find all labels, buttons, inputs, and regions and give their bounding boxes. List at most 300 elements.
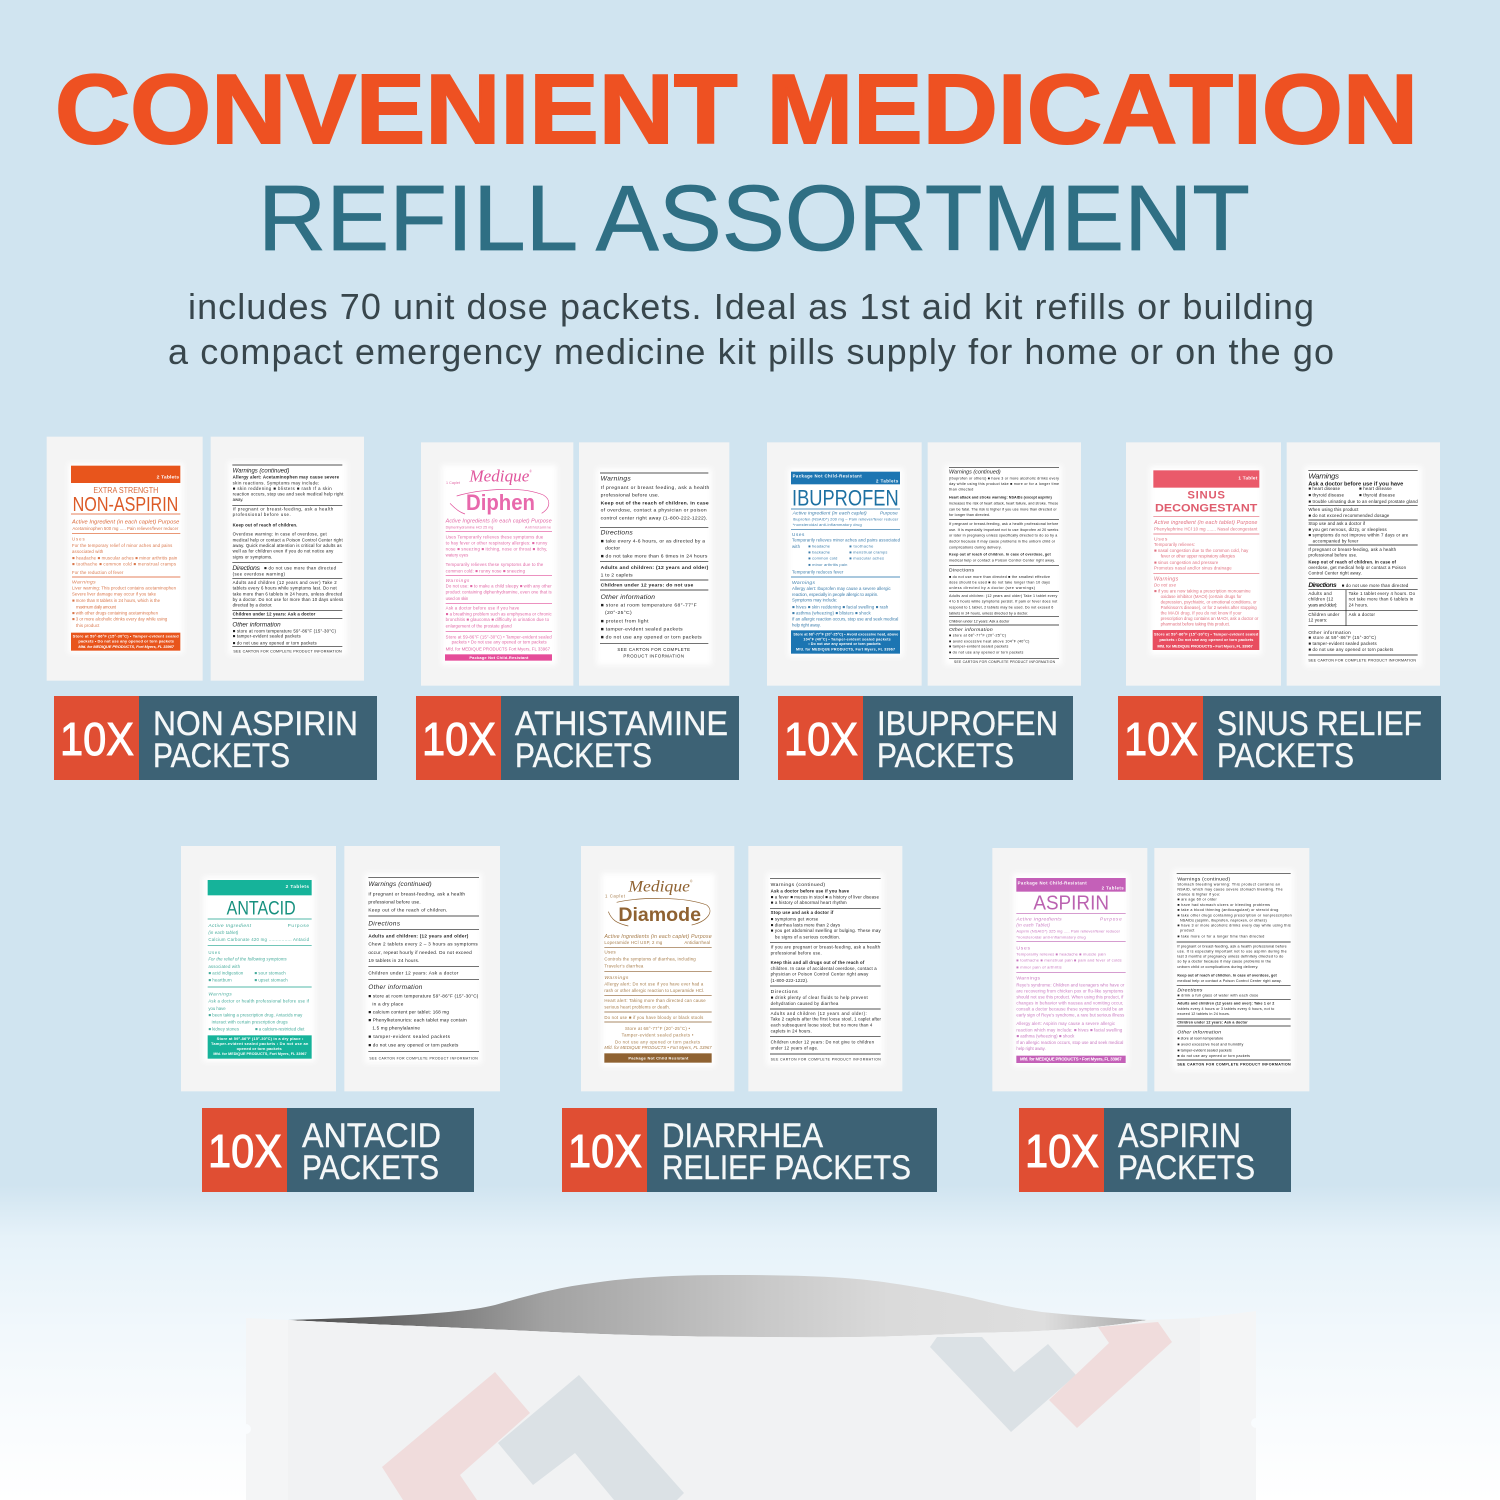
- packet back: sinus decongestant: Take 1 tablet every 4 hours. Do: [1349, 591, 1416, 596]
- packet front: diamode: Antidiarrheal: [684, 940, 710, 945]
- packet front: diphen: used on skin: [446, 596, 469, 601]
- packet back: sinus decongestant: ■ do not use more than directed: [1342, 583, 1409, 588]
- packet front: diamode: Traveler's diarrhea: [604, 964, 644, 969]
- packet front: antacid: (in each tablet): [208, 930, 239, 935]
- packet front: sinus decongestant: Uses: [1154, 537, 1168, 543]
- packet back: diamode: Adults and children (12 years and older):: [771, 1011, 867, 1016]
- packet front: sinus decongestant: prescription drug contains an MAOI, ask a doctor or: [1161, 616, 1259, 621]
- panel: sinus decongestant packet pair: [1126, 442, 1440, 686]
- packet front: antacid: ■ sour stomach: [254, 971, 286, 976]
- packet front: diphen: Package Not Child-Resistant: [469, 655, 529, 660]
- packet back: antacid: in a dry place: [372, 1002, 404, 1007]
- packet front: non-aspirin: Severe liver damage may occur if you take: [72, 592, 157, 597]
- packet back: diamode: be signs of a serious condition.: [775, 934, 840, 939]
- packet back: diphen: Adults and children: (12 years and older): [601, 565, 709, 571]
- panel: ibuprofen packet pair: [767, 442, 1081, 686]
- packet front: sinus decongestant: depression, psychiatric, or emotional conditions, or: [1161, 599, 1257, 604]
- packet back: diamode: ■ you get abdominal swelling or bulging. These may: [771, 928, 881, 933]
- packet front: non-aspirin: maximum daily amount: [76, 604, 117, 609]
- packet front: diphen: Temporarily relieves these symptoms due to the: [446, 562, 544, 567]
- packet back: ibuprofen: respond to 1 tablet, 2 tablets may be used. Do not exceed 6: [949, 605, 1053, 609]
- packet back: aspirin: Keep out of reach of children. In case of overdose, get: [1177, 974, 1277, 978]
- packet front: diphen: watery eyes: [446, 552, 468, 557]
- packet back: diamode: Keep this and all drugs out of the reach of: [771, 960, 865, 965]
- packet front: aspirin: ■ toothache ■ menstrual pain ■ pain and fever of colds: [1016, 958, 1122, 963]
- packet back: diamode: professional before use.: [771, 950, 822, 955]
- packet back: diphen: SEE CARTON FOR COMPLETE: [617, 647, 690, 652]
- packet front: diphen: Warnings: [446, 578, 470, 583]
- packet front: antacid: ANTACID: [227, 899, 296, 920]
- packet back: non-aspirin: ■ store at room temperature 59°-86°F (15°-30°C): [233, 629, 337, 634]
- badge: aspirin: 10X: [1025, 1125, 1099, 1177]
- packet back: diphen: of overdose, contact a physician or poison: [601, 508, 707, 514]
- packet front: ibuprofen: ■ minor arthritis pain: [808, 562, 847, 567]
- packet back: aspirin: ■ do not use any opened or torn packets: [1177, 1054, 1250, 1058]
- packet front: diphen: Diphen: [466, 490, 535, 515]
- packet front: ibuprofen: ■ headache: [808, 544, 831, 549]
- packet front: non-aspirin: this product: [76, 623, 100, 628]
- packet front: sinus decongestant: Parkinson's disease), or for 2 weeks after stopping: [1161, 605, 1257, 610]
- packet back: aspirin: use. It is especially important not to use aspirin during the: [1177, 949, 1287, 953]
- packet front: diamode: Controls the symptoms of diarrhea, including: [604, 957, 696, 962]
- packet front: diamode: Heart alert: Taking more than directed can cause: [604, 998, 706, 1003]
- packet back: antacid: ■ store at room temperature 59°-86°F (15°-30°C): [368, 994, 479, 999]
- badge: ibuprofen: IBUPROFEN: [877, 705, 1058, 743]
- packet back: diamode: Children under 12 years: Do not give to children: [771, 1039, 875, 1044]
- packet front: aspirin: ■ asthma (wheezing) ■ shock: [1016, 1034, 1075, 1039]
- packet front: ibuprofen: ■ hives ■ skin reddening ■ facial swelling ■ rash: [792, 604, 889, 609]
- packet back: diphen: ■ do not take more than 6 times in 24 hours: [601, 554, 708, 560]
- packet front: diamode: Store at 68°-77°F (20°-25°C) •: [625, 1026, 690, 1031]
- packet back: ibuprofen: can be fatal. The risk is higher if you use more than directed or: [949, 507, 1057, 511]
- packet back: ibuprofen: Keep out of reach of children. In case of overdose, get: [949, 553, 1051, 557]
- pouch body: [246, 1311, 1256, 1500]
- packet back: aspirin: so by a doctor because it may cause problems in the: [1177, 960, 1271, 964]
- packet front: aspirin: should not use this product. When using this product, if: [1016, 994, 1124, 999]
- packet back: sinus decongestant: 24 hours.: [1349, 602, 1368, 607]
- packet front: sinus decongestant: 1 Tablet: [1238, 475, 1258, 480]
- packet back: aspirin: Children under 12 years: Ask a doctor: [1177, 1020, 1248, 1024]
- packet front: diamode: rash or other allergic reaction to Loperamide HCl.: [604, 988, 704, 993]
- badge: diarrhea relief: DIARRHEA: [662, 1117, 823, 1155]
- packet back: sinus decongestant: SEE CARTON FOR COMPLETE PRODUCT INFORMATION: [1308, 659, 1416, 663]
- packet back: diamode: children. In case of accidental overdose, contact a: [771, 966, 877, 971]
- packet front: antacid: Warnings: [208, 992, 232, 997]
- packet back: non-aspirin: (see overdose warning): [233, 572, 286, 577]
- packet front: antacid: associated with: [208, 964, 241, 969]
- packet back: ibuprofen: for longer than directed.: [949, 513, 990, 517]
- packet front: ibuprofen: Active ingredient (in each caplet): [792, 511, 867, 517]
- packet back: ibuprofen: or later in pregnancy unless specifically directed to do so by a: [949, 534, 1058, 538]
- packet back: sinus decongestant: [1287, 442, 1440, 686]
- packet back: diamode: ■ diarrhea lasts more than 2 days: [771, 922, 840, 927]
- packet back: diamode: physician or Poison Control Center right away: [771, 972, 869, 977]
- packet back: aspirin: exceed 12 tablets in 24 hours.: [1177, 1012, 1230, 1016]
- packet back: aspirin: NSAIDs (aspirin, ibuprofen, naproxen, or others): [1180, 918, 1267, 922]
- badge: antihistamine: [416, 696, 739, 780]
- packet front: diamode: Allergy alert: Do not use if you have ever had a: [604, 981, 704, 986]
- packet back: ibuprofen: [928, 442, 1081, 686]
- packet front: antacid: [181, 846, 336, 1091]
- packet front: antacid: Calcium Carbonate 420 mg ................ Antacid: [208, 937, 310, 942]
- packet front: non-aspirin: [47, 437, 203, 681]
- packet back: ibuprofen: Warnings (continued): [949, 469, 1001, 475]
- packet back: sinus decongestant: If pregnant or breast-feeding, ask a health: [1308, 547, 1397, 552]
- packet back: antacid: Adults and children: (12 years and older): [368, 934, 469, 939]
- packet back: diamode: SEE CARTON FOR COMPLETE PRODUCT INFORMATION: [771, 1057, 881, 1061]
- packet front: diamode: Package Not Child Resistant: [628, 1055, 689, 1060]
- packet back: sinus decongestant: Children under: [1308, 612, 1340, 617]
- packet front: sinus decongestant: ■ sinus congestion and pressure: [1154, 560, 1219, 565]
- badge: aspirin: PACKETS: [1118, 1149, 1255, 1187]
- packet back: aspirin: NSAID, which may cause severe stomach bleeding. The: [1177, 887, 1283, 891]
- packet front: diphen: Do not use: ■ to make a child sleepy ■ with any other: [446, 584, 552, 589]
- packet front: diphen: ®: [529, 469, 532, 473]
- packet back: ibuprofen: Other information: [949, 627, 993, 633]
- packet front: sinus decongestant: ■ nasal congestion due to the common cold, hay: [1154, 548, 1249, 553]
- packet back: diphen: Other information: [601, 594, 655, 601]
- packet front: ibuprofen: Mfd. for MEDIQUE PRODUCTS, Fort Myers, FL 33967: [796, 647, 895, 651]
- packet front: antacid: Mfd. for MEDIQUE PRODUCTS, Fort Myers, FL 33967: [213, 1052, 307, 1056]
- packet front: aspirin: reaction which may include: ■ hives ■ facial swelling: [1016, 1027, 1123, 1032]
- packet back: diphen: ■ take every 4-6 hours, or as directed by a: [601, 538, 705, 544]
- packet front: non-aspirin: 2 Tablets: [157, 475, 179, 481]
- packet back: aspirin: ■ take a blood thinning (anticoagulant) or steroid drug: [1177, 908, 1278, 912]
- packet front: non-aspirin: associated with: [72, 549, 104, 554]
- packet front: diamode: [581, 846, 734, 1091]
- packet front: non-aspirin: NON-ASPIRIN: [73, 493, 178, 516]
- packet back: aspirin: [1154, 848, 1309, 1091]
- packet back: aspirin: chance is higher if you:: [1177, 892, 1220, 896]
- packet front: aspirin: Package Not Child-Resistant: [1018, 880, 1087, 885]
- packet back: antacid: Directions: [368, 920, 401, 927]
- packet back: sinus decongestant: years and older):: [1308, 602, 1337, 607]
- packet front: sinus decongestant: Phenylephrine HCl 10 mg ....... Nasal decongestant: [1154, 527, 1258, 532]
- packet front: aspirin: Uses: [1016, 945, 1030, 951]
- packet front: non-aspirin: ■ with other drugs containing acetaminophen: [72, 610, 159, 615]
- packet back: diphen: ■ do not use any opened or torn packets: [601, 635, 702, 641]
- packet front: aspirin: Mfd. for MEDIQUE PRODUCTS • Fort Myers, FL 33967: [1020, 1057, 1122, 1062]
- packet back: diamode: under 12 years of age.: [771, 1045, 818, 1050]
- packet back: diphen: Keep out of the reach of children. In case: [601, 500, 709, 506]
- title line 1: CONVENIENT MEDICATION: [55, 54, 1418, 164]
- packet back: ibuprofen: ■ do not use any opened or torn packets: [949, 651, 1024, 655]
- logo mark right: [930, 1322, 1172, 1432]
- packet back: ibuprofen: day while using this product take ■ more or for a longer time: [949, 482, 1059, 486]
- packet front: diamode: Active Ingredients (in each caplet) Purpose: [603, 934, 712, 940]
- packet front: diamode: ®: [690, 880, 693, 884]
- packet back: diamode: dehydration caused by diarrhea: [771, 1001, 839, 1006]
- packet front: diamode: Loperamide HCl USP, 2 mg: [604, 940, 663, 945]
- packet front: sinus decongestant: Warnings: [1154, 576, 1179, 582]
- packet front: ibuprofen: reaction, especially in people allergic to aspirin.: [792, 592, 878, 597]
- badge: sinus relief: PACKETS: [1217, 737, 1354, 775]
- packet back: antacid: Keep out of the reach of children.: [368, 908, 447, 913]
- packet front: antacid: Active Ingredient: [207, 923, 252, 929]
- packet back: sinus decongestant: ■ do not exceed recommended dosage: [1308, 513, 1390, 518]
- packet back: non-aspirin: ■ tamper-evident sealed packets: [233, 634, 301, 639]
- packet back: non-aspirin: Other information: [232, 622, 281, 629]
- packet front: antacid: Purpose: [288, 923, 309, 928]
- badge: aspirin: [1019, 1108, 1291, 1192]
- packet front: antacid: ■ been taking a prescription drug. Antacids may: [208, 1013, 303, 1018]
- packet back: diamode: ■ a fever ■ mucus in stool ■ a history of liver disease: [771, 894, 880, 899]
- packet back: diamode: [748, 846, 902, 1091]
- title: [55, 54, 1418, 270]
- packet front: sinus decongestant: Temporarily relieves:: [1154, 542, 1195, 547]
- packet back: non-aspirin: ■ skin reddening ■ blisters ■ rash If a skin: [233, 486, 332, 491]
- packet back: aspirin: Stomach bleeding warning: This product contains an: [1177, 883, 1280, 887]
- packet front: ibuprofen: Package Not Child-Resistant: [793, 473, 862, 478]
- packet back: diphen: Directions: [601, 529, 633, 536]
- packet front: antacid: Uses: [208, 950, 220, 955]
- packet front: antacid: Store at 59°-86°F (15°-30°C) in a dry place •: [217, 1036, 304, 1041]
- badge: ibuprofen: 10X: [784, 713, 858, 765]
- packet back: non-aspirin: well as for children even if you do not notice any: [233, 549, 334, 554]
- badge: diarrhea relief: RELIEF PACKETS: [662, 1149, 911, 1187]
- packet front: aspirin: early sign of Reye's syndrome, a rare but serious illness: [1016, 1012, 1124, 1017]
- packet front: diamode: serious heart problems or death.: [604, 1005, 670, 1010]
- packet back: sinus decongestant: accompanied by fever: [1313, 539, 1359, 544]
- packet front: diphen: 1 Caplet: [446, 481, 460, 485]
- packet back: aspirin: tablets every 4 hours or 3 tablets every 6 hours, not to: [1177, 1007, 1274, 1011]
- packet back: antacid: Other information: [368, 984, 423, 991]
- packet back: aspirin: Directions: [1177, 988, 1203, 994]
- packet front: ibuprofen: Temporarily reduces fever: [792, 569, 844, 574]
- packet back: sinus decongestant: Other information: [1308, 630, 1351, 635]
- packet back: diamode: Stop use and ask a doctor if: [771, 910, 834, 915]
- packet front: non-aspirin: Active Ingredient (in each caplet) Purpose: [71, 520, 179, 526]
- packet front: antacid: Ask a doctor or health professional before use if: [208, 999, 310, 1004]
- packet back: ibuprofen: complications during delivery.: [949, 545, 1002, 549]
- badge: aspirin: ASPIRIN: [1118, 1117, 1241, 1155]
- packet back: sinus decongestant: ■ you get nervous, dizzy, or sleepless: [1308, 527, 1387, 532]
- packet front: aspirin: help right away.: [1016, 1046, 1046, 1051]
- packet back: diphen: (20°-25°C): [605, 610, 632, 616]
- packet back: diphen: doctor: [605, 545, 620, 551]
- badge: antacid: ANTACID: [302, 1117, 441, 1155]
- packet back: ibuprofen: (Ibuprofen or others) ■ have 3 or more alcoholic drinks every: [949, 476, 1059, 480]
- packet front: diphen: Diphenhydramine HCl 25 mg: [446, 525, 493, 529]
- packet back: non-aspirin: professional before use.: [233, 512, 291, 517]
- packet back: ibuprofen: dose should be used ■ do not take longer than 10 days: [949, 580, 1050, 584]
- packet front: diamode: Medique: [627, 879, 690, 896]
- packet back: ibuprofen: 4 to 6 hours while symptoms persist. If pain or fever does not: [949, 600, 1057, 604]
- packet back: aspirin: ■ tamper-evident sealed packets: [1177, 1048, 1232, 1052]
- packet front: diphen: ■ a breathing problem such as emphysema or chronic: [446, 611, 552, 616]
- packet front: diphen: Medique: [468, 467, 530, 486]
- badge: diarrhea relief: 10X: [568, 1125, 642, 1177]
- packet back: ibuprofen: Adults and children: (12 years and older) Take 1 tablet every: [949, 594, 1058, 598]
- packet front: aspirin: Purpose: [1100, 917, 1122, 922]
- badge: antacid: 10X: [208, 1125, 282, 1177]
- packet front: ibuprofen: IBUPROFEN: [792, 486, 899, 511]
- badge: antihistamine: PACKETS: [515, 737, 652, 775]
- packet back: non-aspirin: by a doctor. Do not use for more than 10 days unless: [233, 597, 343, 602]
- packet front: antacid: you have: [208, 1006, 226, 1011]
- packet back: non-aspirin: signs or symptoms.: [233, 554, 272, 559]
- badge: sinus relief: SINUS RELIEF: [1217, 705, 1422, 743]
- packet back: ibuprofen: increases the risk of heart attack, heart failure, and stroke. These: [949, 501, 1058, 505]
- packet front: aspirin: 2 Tablets: [1102, 885, 1124, 890]
- packet back: diamode: ■ symptoms get worse: [771, 916, 819, 921]
- packet back: diamode: If you are pregnant or breast-feeding, ask a health: [771, 945, 881, 950]
- packet back: ibuprofen: ■ do not use more than directed ■ the smallest effective: [949, 575, 1050, 579]
- packet front: diamode: 1 Caplet: [605, 893, 626, 898]
- badge: ibuprofen: [778, 696, 1073, 780]
- packet front: ibuprofen: Symptoms may include:: [792, 598, 837, 603]
- packet back: antacid: Chew 2 tablets every 2 – 3 hours as symptoms: [368, 942, 478, 947]
- packet back: non-aspirin: Allergy alert: Acetaminophen may cause severe: [233, 475, 340, 480]
- packet front: sinus decongestant: [1126, 442, 1281, 686]
- badge: non aspirin: PACKETS: [153, 737, 290, 775]
- packet front: non-aspirin: Acetaminophen 500 mg ..... Pain reliever/fever reducer: [72, 526, 179, 531]
- packet front: non-aspirin: Warnings: [72, 580, 96, 586]
- packet front: sinus decongestant: Do not use: [1154, 583, 1177, 588]
- packet back: non-aspirin: ■ do not use any opened or torn packets: [233, 640, 317, 645]
- subtitle: includes 70 unit dose packets. Ideal as 1st aid kit refills or building: [188, 286, 1314, 327]
- packet back: aspirin: product: [1180, 929, 1194, 933]
- panel: non-aspirin packet pair: [47, 437, 364, 681]
- packet front: aspirin: Active ingredients: [1015, 917, 1062, 923]
- packet back: diamode: ■ drink plenty of clear fluids to help prevent: [771, 995, 868, 1000]
- packet front: diphen: nose ■ sneezing ■ itching, nose or throat ■ itchy,: [446, 546, 547, 551]
- packet back: sinus decongestant: ■ symptoms do not improve within 7 days or are: [1308, 533, 1409, 538]
- packet back: diphen: ■ store at room temperature 68°-77°F: [601, 603, 697, 609]
- packet back: sinus decongestant: not take more than 6 tablets in: [1349, 597, 1414, 602]
- packet front: non-aspirin: ■ toothache ■ common cold ■ menstrual cramps: [72, 562, 176, 567]
- packet front: aspirin: ■ minor pain of arthritis: [1016, 964, 1062, 969]
- pouch opening: [288, 1275, 1147, 1337]
- packet back: aspirin: Warnings (continued): [1177, 876, 1230, 882]
- packet back: antacid: occur, repeat hourly if needed. Do not exceed: [368, 950, 472, 955]
- packet back: ibuprofen: doctor because it may cause problems in the unborn child or: [949, 539, 1056, 543]
- packet front: sinus decongestant: Store at 59°-86°F (15°-30°C) • Tamper-evident sealed: [1154, 632, 1259, 637]
- packet back: sinus decongestant: ■ do not use any opened or torn packets: [1308, 647, 1393, 652]
- packet front: antacid: opened or torn packets: [237, 1046, 282, 1051]
- packet front: non-aspirin: Liver warning: This product contains acetaminophen: [72, 586, 177, 591]
- packet front: sinus decongestant: SINUS: [1187, 490, 1225, 502]
- packet back: ibuprofen: tablets in 24 hours, unless directed by a doctor.: [949, 611, 1028, 615]
- panel: diamode packet pair: [581, 846, 902, 1091]
- packet front: diphen: enlargement of the prostate gland: [446, 623, 512, 628]
- packet back: non-aspirin: [211, 437, 364, 681]
- packet front: ibuprofen: with: [792, 544, 801, 549]
- packet back: sinus decongestant: children (12: [1308, 597, 1334, 602]
- packet back: diamode: ■ a history of abnormal heart rhythm: [771, 900, 847, 905]
- packet back: diamode: Directions: [771, 989, 798, 995]
- packet back: diphen: Warnings: [601, 476, 631, 483]
- packet front: aspirin: ASPIRIN: [1033, 892, 1109, 915]
- packet front: diphen: Active Ingredients (in each caplet) Purpose: [445, 518, 552, 524]
- packet front: diphen: Store at 59-86°F (15°-30°C) • Tamper-evident sealed: [446, 634, 552, 639]
- badge: non aspirin: 10X: [60, 713, 134, 765]
- packet back: antacid: ■ tamper-evident sealed packets: [368, 1034, 451, 1039]
- packet back: sinus decongestant: Directions: [1308, 582, 1337, 589]
- packet front: diphen: Mfd. for MEDIQUE PRODUCTS Fort Myers, FL 33967: [446, 646, 551, 651]
- packet front: aspirin: *nonsteroidal anti-inflammatory drug: [1016, 935, 1086, 940]
- packet front: non-aspirin: ■ headache ■ muscular aches ■ minor arthritis pain: [72, 555, 178, 560]
- packet back: ibuprofen: Heart attack and stroke warning: NSAIDs (except aspirin): [949, 496, 1052, 500]
- packet front: antacid: ■ acid indigestion: [208, 971, 244, 976]
- packet back: diphen: PRODUCT INFORMATION: [623, 654, 684, 659]
- packet back: ibuprofen: ■ store at 68°-77°F (20°-25°C): [949, 634, 1006, 638]
- packet back: non-aspirin: SEE CARTON FOR COMPLETE PRODUCT INFORMATION: [233, 649, 342, 653]
- badge: non aspirin: NON ASPIRIN: [153, 705, 358, 743]
- packet front: non-aspirin: Store at 59°-86°F (15°-30°C) • Tamper-evident sealed: [73, 634, 179, 639]
- packet back: non-aspirin: away.: [233, 497, 243, 502]
- packet front: non-aspirin: packets • Do not use any opened or torn packets: [78, 639, 175, 644]
- packet front: sinus decongestant: ■ if you are now taking a prescription monoamine: [1154, 589, 1251, 594]
- badge: antihistamine: ATHISTAMINE: [515, 705, 728, 743]
- packet front: non-aspirin: For the reduction of fever: [72, 570, 124, 575]
- packet back: sinus decongestant: 12 years:: [1308, 618, 1327, 623]
- packet front: ibuprofen: ■ asthma (wheezing) ■ blisters ■ shock: [792, 610, 871, 615]
- packet front: diphen: common cold: ■ runny nose ■ sneezing: [446, 568, 526, 573]
- packet back: aspirin: unborn child or complications during delivery.: [1177, 965, 1258, 969]
- packet back: non-aspirin: Keep out of reach of children.: [233, 523, 297, 528]
- packet front: sinus decongestant: Promotes nasal and/or sinus drainage: [1154, 566, 1232, 571]
- packet front: diamode: Uses: [604, 950, 616, 955]
- packet front: ibuprofen: *nonsteroidal anti-inflammatory drug: [793, 522, 862, 527]
- packet back: non-aspirin: Warnings (continued): [233, 468, 289, 474]
- packet back: diphen: Children under 12 years: do not use: [601, 582, 694, 588]
- packet back: sinus decongestant: Adults and: [1308, 591, 1332, 596]
- packet front: non-aspirin: ■ 3 or more alcoholic drinks every day while using: [72, 617, 168, 622]
- badge: antacid: PACKETS: [302, 1149, 439, 1187]
- packet front: ibuprofen: help right away.: [792, 622, 821, 627]
- packet back: aspirin: ■ have 3 or more alcoholic drinks every day while using this: [1177, 924, 1291, 928]
- packet front: ibuprofen: Purpose: [880, 511, 898, 516]
- packet front: ibuprofen: • Do not use any opened or torn packets: [808, 642, 881, 646]
- packet front: sinus decongestant: oxidase inhibitor (MAOI) (certain drugs for: [1161, 594, 1242, 599]
- packet front: diphen: product containing diphenhydramine, even one that is: [446, 590, 552, 595]
- packet back: ibuprofen: ■ avoid excessive heat above 104°F (40°C): [949, 639, 1029, 643]
- packet front: ibuprofen: Ibuprofen (NSAID*) 200 mg – Pain reliever/fever reducer: [793, 516, 899, 521]
- packet front: diphen: packets • Do not use any opened or torn packets: [452, 640, 547, 645]
- packet front: aspirin: If an allergic reaction occurs, stop use and seek medical: [1016, 1040, 1123, 1045]
- panel: diphen packet pair: [421, 442, 729, 686]
- packet back: antacid: 1.5 mg phenylalanine: [372, 1026, 420, 1031]
- packet front: diphen: Antihistamine: [525, 525, 551, 529]
- packet front: ibuprofen: ■ muscular aches: [849, 556, 884, 561]
- packet back: aspirin: Adults and children (12 years and over): Take 1 or 2: [1177, 1002, 1274, 1006]
- packet front: sinus decongestant: Mfd. for MEDIQUE PRODUCTS • Fort Myers, FL 33967: [1157, 643, 1253, 648]
- packet back: diamode: Warnings (continued): [771, 882, 825, 888]
- packet front: antacid: 2 Tablets: [286, 884, 309, 889]
- packet back: non-aspirin: medical help or contact a Poison Control Center right: [233, 537, 343, 542]
- packet back: non-aspirin: take more than 6 tablets in 24 hours, unless directed: [233, 591, 343, 596]
- packet back: diamode: Take 2 caplets after the first loose stool, 1 caplet after: [771, 1017, 882, 1022]
- panel: aspirin packet pair: [992, 848, 1309, 1091]
- packet front: ibuprofen: ■ toothache: [849, 544, 874, 549]
- packet back: ibuprofen: If pregnant or breast-feeding, ask a health professional before: [949, 522, 1058, 526]
- packet front: ibuprofen: Warnings: [792, 580, 815, 586]
- packet back: aspirin: last 3 months of pregnancy unless definitely directed to do: [1177, 954, 1283, 958]
- packet back: non-aspirin: Overdose warning: In case of overdose, get: [233, 532, 327, 537]
- packet back: antacid: Children under 12 years: Ask a doctor: [368, 970, 459, 975]
- packet front: ibuprofen: 2 Tablets: [876, 479, 899, 484]
- packet front: aspirin: Warnings: [1016, 976, 1040, 982]
- packet front: antacid: interact with certain prescription drugs: [212, 1020, 288, 1025]
- packet front: antacid: ■ a calcium-restricted diet: [255, 1027, 305, 1032]
- packet front: ibuprofen: ■ common cold: [808, 556, 837, 561]
- packet front: sinus decongestant: pharmacist before taking this product.: [1161, 622, 1230, 627]
- packet back: ibuprofen: Children under 12 years: Ask a doctor: [949, 619, 1010, 623]
- packet back: sinus decongestant: Stop use and ask a doctor if: [1308, 521, 1366, 526]
- packet front: diamode: Do not use any opened or torn packets: [615, 1039, 700, 1044]
- panel: antacid packet pair: [181, 846, 500, 1091]
